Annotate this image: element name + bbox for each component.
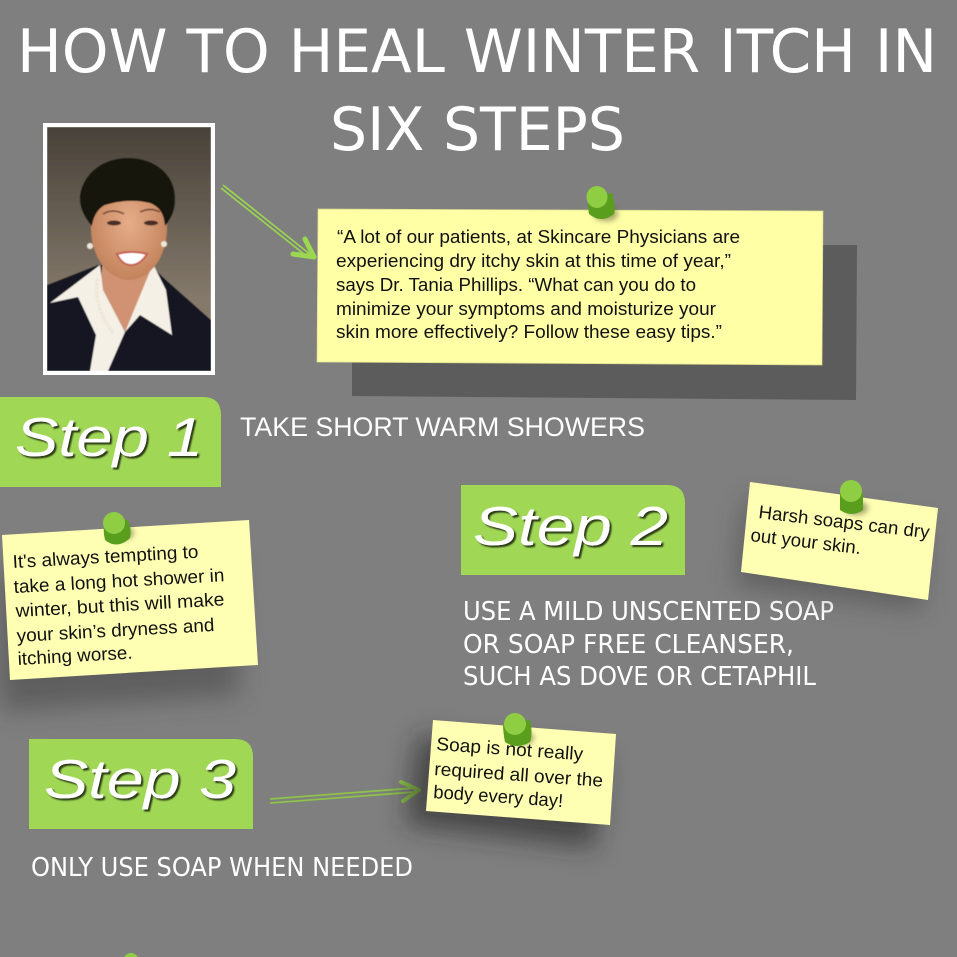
quote panel backing bbox=[352, 245, 857, 400]
sticky note: step 3: Soap is not really bbox=[436, 733, 585, 764]
sticky note: step 3: body every day! bbox=[433, 781, 564, 811]
sticky note: step 2 bbox=[735, 482, 938, 610]
quote text: skin more effectively? Follow these easy tips.” bbox=[336, 321, 722, 342]
step 3 badge bbox=[29, 739, 253, 829]
pin: step 3 bbox=[503, 713, 534, 746]
quote text: says Dr. Tania Phillips. “What can you do to bbox=[336, 274, 696, 295]
step 2 badge bbox=[461, 485, 685, 575]
step 2 heading: USE A MILD UNSCENTED SOAP bbox=[463, 597, 834, 627]
title bbox=[17, 17, 937, 165]
step 3 badge: Step 3 bbox=[44, 748, 236, 810]
title: SIX STEPS bbox=[330, 95, 625, 165]
sticky note: step 1: itching worse. bbox=[17, 642, 133, 669]
step 2 heading: SUCH AS DOVE OR CETAPHIL bbox=[463, 662, 816, 692]
arrow: photo to quote bbox=[221, 185, 314, 258]
sticky note: step 1: It's always tempting to bbox=[12, 541, 199, 572]
step 2 badge: Step 2 bbox=[473, 495, 668, 557]
step 1 badge bbox=[0, 397, 221, 487]
pin: cut off at bottom edge bbox=[123, 953, 139, 957]
sticky note: step 3: required all over the bbox=[434, 758, 604, 791]
quote text: “A lot of our patients, at Skincare Physicians are bbox=[337, 226, 740, 247]
sticky note: step 2: out your skin. bbox=[750, 524, 862, 558]
arrow: step 3 to note bbox=[270, 782, 419, 803]
sticky note: step 1 bbox=[0, 520, 258, 712]
sticky note: step 3 bbox=[405, 720, 616, 848]
sticky note: quote bbox=[317, 209, 823, 365]
sticky note: step 1: your skin’s dryness and bbox=[16, 614, 215, 646]
sticky note: step 1: take a long hot shower in bbox=[13, 564, 225, 597]
quote text: minimize your symptoms and moisturize your bbox=[336, 298, 716, 319]
pin: step 1 bbox=[103, 512, 134, 545]
step 2 heading bbox=[463, 597, 834, 692]
step 2 heading: OR SOAP FREE CLEANSER, bbox=[463, 630, 794, 660]
quote text bbox=[336, 226, 740, 342]
pin: step 2 bbox=[840, 480, 868, 515]
pin: quote bbox=[586, 186, 618, 221]
quote text: experiencing dry itchy skin at this time of year,” bbox=[336, 250, 731, 271]
title: HOW TO HEAL WINTER ITCH IN bbox=[17, 17, 937, 87]
step 1 badge: Step 1 bbox=[15, 406, 203, 468]
sticky note: step 2: Harsh soaps can dry bbox=[758, 501, 932, 542]
step 3 heading: ONLY USE SOAP WHEN NEEDED bbox=[31, 853, 413, 883]
photo: Dr. Tania Phillips portrait bbox=[43, 123, 215, 375]
sticky note: step 1: winter, but this will make bbox=[14, 588, 225, 621]
step 1 heading: TAKE SHORT WARM SHOWERS bbox=[240, 412, 645, 442]
